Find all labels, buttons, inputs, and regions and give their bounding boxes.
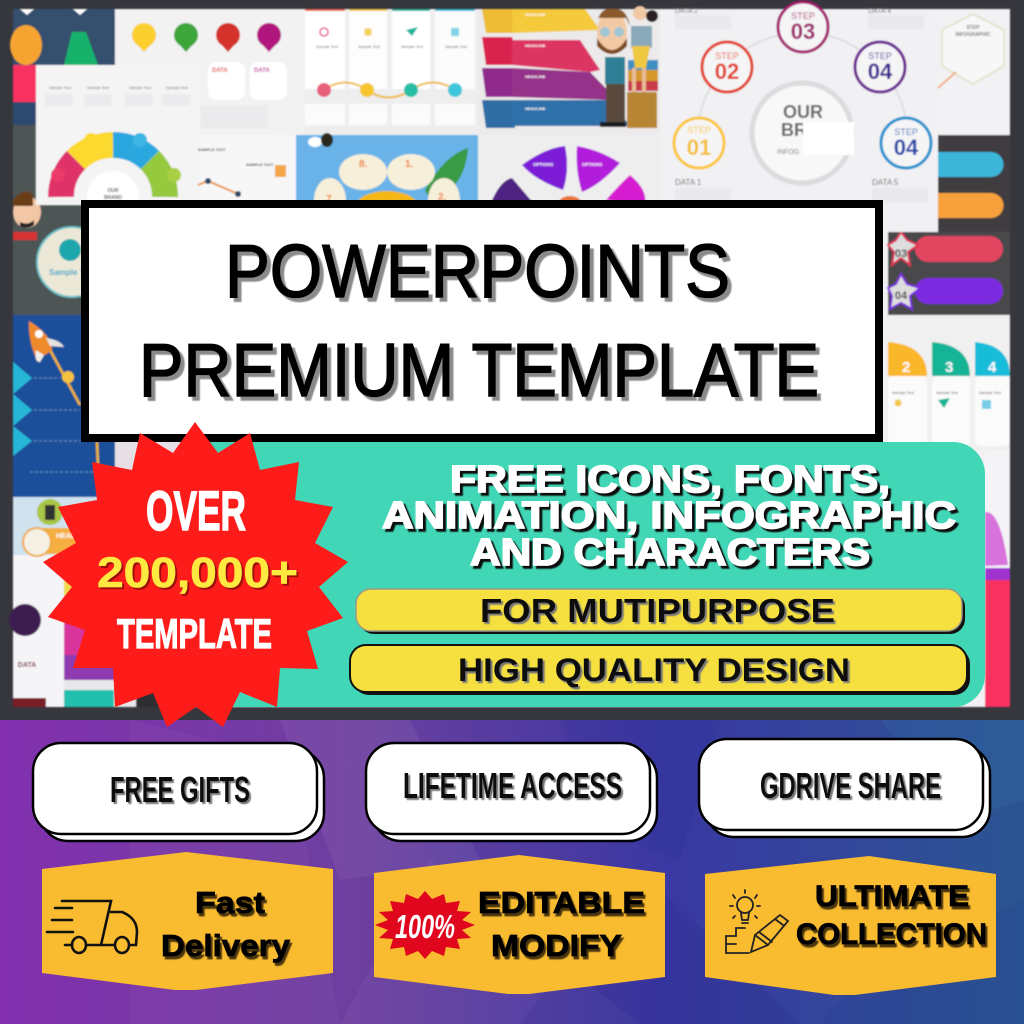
preview: headline and data tile lower left bbox=[9, 497, 194, 707]
preview: white gauge panel: Sample Text bbox=[49, 85, 72, 90]
badge text: MODIFY bbox=[491, 928, 622, 963]
preview: ribbon banners tile bbox=[478, 9, 660, 135]
feature headline: ANIMATION, INFOGRAPHIC bbox=[382, 495, 956, 537]
preview: step cards tile: Sample Text bbox=[445, 44, 468, 49]
preview: step cards right: Sample Text bbox=[892, 390, 915, 395]
feature headline: AND CHARACTERS bbox=[470, 532, 870, 574]
preview: white gauge panel: BRAND bbox=[104, 195, 122, 201]
pill: high quality design: HIGH QUALITY DESIGN bbox=[458, 652, 850, 688]
preview: headline and data tile lower left: HEADLINE bbox=[56, 533, 92, 540]
preview: option petals tile bbox=[478, 135, 660, 212]
preview: flower on blue tile bbox=[296, 133, 478, 222]
bottom gradient band bbox=[0, 720, 1024, 1024]
preview: hexagon step tile: STEP bbox=[966, 25, 980, 31]
preview: flower on blue tile: 1. bbox=[405, 159, 414, 170]
button: free gifts: FREE GIFTS bbox=[110, 769, 250, 810]
preview: step cards tile: Sample Text bbox=[316, 44, 339, 49]
preview: map pins tile: DATA bbox=[212, 68, 228, 74]
preview: step cards right: 3 bbox=[945, 359, 953, 376]
preview: steps circle panel: DATA 2 bbox=[675, 8, 698, 15]
button: free gifts bbox=[33, 743, 324, 841]
preview: dark tile with pills: 03 bbox=[895, 248, 907, 260]
preview: steps circle panel: DATA 5 bbox=[872, 178, 899, 187]
preview: white gauge panel: OUR bbox=[107, 188, 119, 194]
preview: hexagon step tile: INFOGRAPHIC bbox=[956, 32, 991, 38]
preview: dark slate side strip bbox=[13, 102, 36, 125]
badge number: 200,000+ bbox=[97, 549, 298, 597]
preview: white gauge panel: Sample Text bbox=[166, 85, 189, 90]
preview: option petals tile: OPTIONS bbox=[582, 162, 602, 167]
badge text: Fast bbox=[195, 885, 265, 920]
preview: step cards right: Sample Text bbox=[979, 390, 1002, 395]
badge: editable modify bbox=[374, 855, 665, 994]
preview: pink tab bbox=[13, 65, 36, 102]
pill: high quality design bbox=[350, 645, 970, 695]
badge text: ULTIMATE bbox=[815, 880, 969, 913]
badge text: over: OVER bbox=[146, 479, 246, 542]
preview: steps circle panel: STEP bbox=[894, 127, 918, 137]
preview: cartoon characters bbox=[596, 6, 658, 128]
preview: steps circle panel: OUR bbox=[783, 102, 823, 122]
starburst badge bbox=[43, 422, 348, 727]
badge text: COLLECTION bbox=[796, 918, 987, 951]
preview: timeline diagram tile bbox=[198, 135, 296, 210]
icon: 100% burst bbox=[375, 891, 475, 959]
badge text bbox=[161, 885, 291, 963]
preview: steps circle panel bbox=[660, 2, 938, 232]
title text: PREMIUM TEMPLATE bbox=[139, 328, 819, 412]
preview: steps circle panel: DATA 4 bbox=[868, 8, 891, 15]
preview: option petals tile: OPTIONS bbox=[533, 162, 553, 167]
preview: step cards right: Sample Text bbox=[936, 390, 959, 395]
preview: flower on blue tile: 2. bbox=[438, 192, 447, 203]
preview: ribbon banners tile: HEADLINE bbox=[525, 74, 546, 79]
preview: rocket on blue tile bbox=[13, 315, 205, 500]
preview: timeline diagram tile: SAMPLE TEXT bbox=[246, 162, 275, 167]
feature headline: FREE ICONS, FONTS, bbox=[450, 459, 890, 501]
title text bbox=[139, 229, 819, 412]
preview: step cards right: 2 bbox=[902, 359, 910, 376]
icon: bulb and pencil bbox=[726, 890, 788, 953]
preview: flower on blue tile: 7. bbox=[326, 194, 335, 205]
collage base bbox=[13, 9, 1010, 707]
preview: steps circle panel: 04 bbox=[894, 135, 919, 160]
badge text bbox=[796, 880, 987, 951]
preview: steps circle panel: 02 bbox=[715, 59, 739, 84]
preview: ribbon banners tile: HEADLINE bbox=[525, 12, 546, 17]
preview: character panel bbox=[13, 125, 113, 315]
title text: POWERPOINTS bbox=[225, 229, 730, 313]
feature headline bbox=[382, 459, 956, 574]
preview: steps circle panel: 04 bbox=[868, 59, 893, 84]
badge text: template: TEMPLATE bbox=[117, 610, 272, 657]
preview: map pins tile bbox=[115, 9, 305, 134]
collage of template previews bbox=[9, 2, 1010, 707]
preview: headline and data tile lower left: DATA bbox=[18, 662, 36, 669]
preview: white gauge panel: Sample Text bbox=[129, 85, 152, 90]
button: gdrive share bbox=[699, 739, 990, 837]
preview: right strip with pink block bbox=[985, 450, 1010, 707]
preview: steps circle panel: 03 bbox=[791, 19, 815, 44]
badge text bbox=[478, 885, 645, 963]
preview: steps circle panel: STEP bbox=[687, 125, 711, 135]
preview: step cards right bbox=[888, 315, 1010, 450]
preview: ribbon banners tile: HEADLINE bbox=[525, 106, 546, 111]
preview: dark tile with pills: 04 bbox=[895, 290, 908, 302]
preview: character panel: Sample T bbox=[49, 268, 85, 277]
dark frame background bbox=[0, 0, 1024, 720]
preview: hexagon step tile bbox=[938, 9, 1010, 135]
preview: white gauge panel: Sample Text bbox=[87, 85, 110, 90]
title box bbox=[81, 200, 883, 442]
preview: step cards right: 4 bbox=[988, 359, 997, 376]
preview: map pins tile: DATA bbox=[254, 68, 270, 74]
preview: flower on blue tile: 8. bbox=[359, 159, 368, 170]
preview: step cards tile bbox=[305, 9, 480, 135]
preview: ribbon banners tile: HEADLINE bbox=[525, 43, 546, 48]
pill: for multipurpose: FOR MUTIPURPOSE bbox=[480, 592, 835, 629]
preview: steps circle panel: BRA bbox=[781, 120, 820, 140]
preview: steps circle panel: 01 bbox=[687, 135, 711, 160]
preview: timeline diagram tile: SAMPLE TEXT bbox=[198, 147, 227, 152]
badge: ultimate collection bbox=[705, 856, 996, 995]
preview: steps circle panel: INFOG bbox=[777, 149, 799, 156]
button: lifetime access: LIFETIME ACCESS bbox=[403, 765, 622, 806]
pill: for multipurpose bbox=[356, 589, 965, 634]
teal feature panel bbox=[170, 442, 985, 707]
preview: white gauge panel bbox=[36, 65, 200, 223]
badge text: EDITABLE bbox=[478, 885, 645, 920]
button: lifetime access bbox=[366, 743, 657, 841]
preview: step cards tile: Sample Text bbox=[358, 44, 381, 49]
badge: fast delivery bbox=[42, 852, 333, 990]
icon: truck bbox=[47, 901, 137, 953]
preview: navy tile top left bbox=[10, 9, 115, 65]
badge text: Delivery bbox=[161, 928, 291, 963]
preview: dark tile with pills bbox=[888, 135, 1010, 315]
preview: step cards tile: Sample Text bbox=[401, 44, 424, 49]
preview: steps circle panel: DATA 1 bbox=[675, 178, 702, 187]
preview: steps circle panel: STEP bbox=[868, 51, 892, 61]
preview: steps circle panel: STEP bbox=[791, 11, 815, 21]
icon: 100% burst: 100% bbox=[395, 908, 455, 945]
preview: steps circle panel: STEP bbox=[715, 51, 739, 61]
